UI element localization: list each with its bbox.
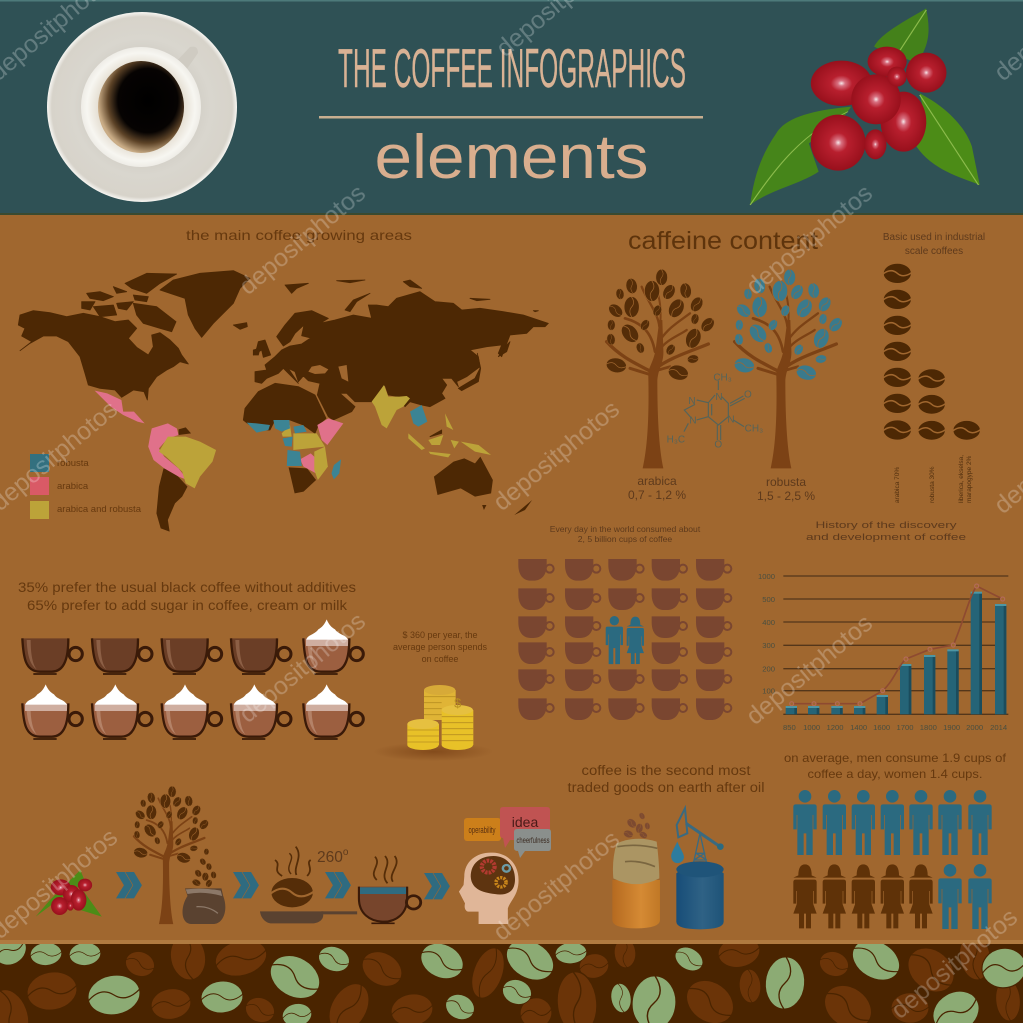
icon: coffee cup on saucer	[47, 12, 237, 202]
heading: men and women: on average, men consume 1.9 cups of	[784, 751, 1007, 765]
text: yearly spend: average person spends	[393, 642, 488, 652]
history chart: 500	[762, 595, 775, 604]
history chart: 1700	[896, 723, 914, 732]
history chart: 1400	[850, 723, 867, 732]
history chart: 2014	[990, 723, 1008, 732]
map legend: robusta	[57, 458, 89, 469]
history chart: 1200	[826, 723, 844, 732]
caffeine molecule: N	[715, 392, 723, 403]
watermarks: depositphotos	[741, 179, 878, 301]
process: coffee berries	[36, 870, 102, 917]
heading: traded goods: traded goods on earth after oil	[568, 780, 764, 795]
speech bubble: idea: idea	[512, 814, 538, 830]
heading: coffee history	[806, 520, 966, 543]
caffeine molecule: N	[688, 396, 696, 407]
heading: cups per day: Every day in the world consumed about	[550, 524, 701, 534]
map legend	[30, 454, 142, 519]
icon: coin stacks	[373, 685, 493, 761]
tree: arabica	[605, 269, 717, 468]
heading: industrial coffees: Basic used in industrial	[883, 232, 985, 243]
caffeine molecule: CH₃	[713, 373, 732, 384]
speech bubble: cheerfulness: cheerfulness	[516, 836, 550, 845]
process: arrow 4	[424, 873, 450, 899]
process: cup of coffee	[359, 856, 421, 923]
process: coffee tree	[133, 786, 210, 924]
label: temperature: o	[343, 847, 349, 858]
heading: growing areas: the main coffee growing areas	[186, 227, 412, 243]
heading: coffee history: and development of coffee	[806, 532, 966, 543]
bean pictogram chart	[883, 263, 981, 440]
icon: coffee sack barrel	[612, 812, 660, 928]
bean chart labels: marapogype 2%	[966, 455, 973, 503]
process: arrow 1	[116, 872, 142, 898]
caffeine molecule: N	[689, 415, 697, 426]
process: arrow 2	[233, 872, 259, 898]
label: arabica: 0,7 - 1,2 %	[628, 488, 686, 502]
label: robusta	[757, 475, 815, 503]
watermarks: depositphotos	[741, 609, 878, 731]
caffeine molecule: CH₃	[745, 424, 763, 435]
heading: coffee preference: 35% prefer the usual black coffee without additives	[18, 579, 356, 595]
history chart: 850	[783, 723, 796, 732]
bottom bean strip	[0, 940, 1023, 1023]
heading: industrial coffees: scale coffees	[905, 246, 963, 257]
heading: men and women	[784, 751, 1007, 781]
heading: caffeine content: caffeine content	[628, 227, 818, 255]
bean chart labels: robusta 30%	[929, 466, 936, 503]
process: sack of beans	[183, 849, 225, 924]
heading: coffee history: History of the discovery	[816, 520, 957, 531]
process: head with gears	[459, 853, 519, 924]
history chart: 1000	[758, 572, 775, 581]
text: yearly spend	[393, 630, 488, 664]
pictogram: men and women	[793, 790, 992, 929]
heading: traded goods	[568, 763, 764, 795]
icon: coffee berries with leaves	[750, 8, 980, 205]
caffeine molecule: H₃C	[667, 434, 685, 445]
subtitle: elements	[374, 123, 648, 192]
heading: coffee preference	[18, 579, 356, 613]
heading: traded goods: coffee is the second most	[582, 763, 751, 778]
map legend: arabica	[57, 481, 89, 492]
icon: coin stacks: $	[454, 696, 461, 710]
heading: men and women: coffee a day, women 1.4 cups.	[808, 767, 982, 781]
caffeine molecule: O	[744, 389, 752, 400]
preference cups	[22, 619, 363, 739]
watermarks: depositphotos	[488, 395, 625, 517]
label: temperature: 260	[317, 849, 343, 866]
history chart: 200	[762, 665, 775, 674]
watermarks: depositphotos	[234, 607, 371, 729]
bean chart labels: liberica, ekselsa,	[958, 455, 965, 503]
watermarks: depositphotos	[886, 903, 1023, 1023]
history chart: 1900	[943, 723, 960, 732]
history chart: 2000	[966, 723, 983, 732]
icon: oil pump and barrel	[671, 808, 724, 929]
process: arrow 3	[325, 872, 351, 898]
text: yearly spend: $ 360 per year, the	[402, 630, 478, 640]
history chart	[758, 572, 1008, 732]
cup grid	[518, 559, 731, 720]
speech bubble: idea	[500, 807, 550, 848]
history chart: 300	[762, 641, 775, 650]
speech bubble: operability	[464, 818, 501, 841]
history chart: 100	[762, 687, 775, 696]
bean chart labels: arabica 70%	[894, 467, 901, 503]
heading: industrial coffees	[883, 232, 985, 257]
label: arabica	[628, 474, 686, 502]
speech bubble: cheerfulness	[514, 829, 551, 858]
history chart: 1800	[920, 723, 937, 732]
label: robusta: 1,5 - 2,5 %	[757, 489, 815, 503]
label: arabica: arabica	[637, 474, 677, 488]
history chart: 1000	[803, 723, 820, 732]
world map	[18, 271, 548, 532]
history chart: 1600	[873, 723, 890, 732]
title divider	[319, 116, 703, 118]
bean chart labels	[894, 455, 973, 503]
caffeine molecule: O	[714, 439, 722, 450]
watermarks: depositphotos	[488, 825, 625, 947]
text: yearly spend: on coffee	[422, 654, 458, 664]
history chart: 400	[762, 618, 775, 627]
caffeine molecule: N	[727, 414, 735, 425]
heading: cups per day	[550, 524, 701, 544]
header band	[0, 0, 1023, 215]
tree: robusta	[733, 269, 845, 468]
heading: cups per day: 2, 5 billion cups of coffee	[578, 534, 672, 544]
label: robusta: robusta	[766, 475, 806, 489]
speech bubble: operability: operability	[468, 825, 496, 835]
caffeine molecule	[667, 373, 763, 450]
map legend: arabica and robusta	[57, 504, 142, 515]
process: roasting pan	[260, 847, 357, 923]
watermarks: depositphotos	[234, 179, 371, 301]
heading: coffee preference: 65% prefer to add sugar in coffee, cream or milk	[27, 597, 348, 613]
